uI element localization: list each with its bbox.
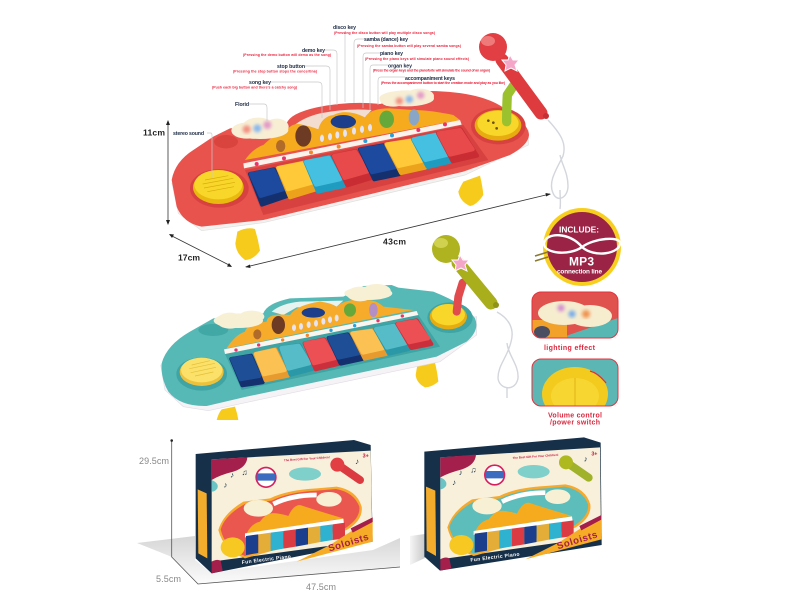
label: organ key: (Press the organ keys and the pianoforte will simulate the sound of an organ) xyxy=(373,68,490,72)
label: samba key: (Pressing the samba button will play several samba songs) xyxy=(357,44,461,48)
box face xyxy=(440,447,601,559)
corner blobs xyxy=(440,455,476,571)
label: disco key xyxy=(333,25,435,35)
speaker dial xyxy=(190,169,249,208)
music notes xyxy=(452,455,588,487)
piano body xyxy=(162,285,476,406)
age mark: 3+ xyxy=(591,451,597,457)
dimension: width 43cm: 43cm xyxy=(383,236,406,246)
piano artwork xyxy=(447,484,590,556)
box 2 floor shadow xyxy=(410,534,425,565)
label: Florid: Florid xyxy=(235,102,249,108)
product title: Fun Electric Piano xyxy=(242,554,291,566)
piano artwork xyxy=(218,487,362,558)
music notes: ♪ xyxy=(584,455,588,464)
corner ribbon xyxy=(525,515,601,559)
label: accompaniment keys: (Press the accompaniment button to start the creation mode and play as you like) xyxy=(381,81,505,85)
box shell xyxy=(424,437,602,571)
dimension: 5.5cm: 5.5cm xyxy=(156,574,181,584)
green microphone xyxy=(432,235,499,308)
include badge: connection line xyxy=(557,268,602,276)
caption: volume control xyxy=(548,412,602,426)
label: samba key: samba (dance) key xyxy=(364,37,408,43)
label: song key: (Push each big button and there's a catchy song) xyxy=(212,86,297,90)
teal piano box xyxy=(424,437,602,571)
handle arc xyxy=(273,495,317,504)
box dimension lines xyxy=(170,439,400,584)
corner blobs xyxy=(212,457,247,573)
teal bubble xyxy=(289,467,321,481)
cable loop xyxy=(544,235,620,254)
piano legs xyxy=(235,176,483,260)
cloud left xyxy=(214,311,264,329)
box face xyxy=(212,451,372,562)
banner xyxy=(247,505,343,533)
music notes: ♫ xyxy=(470,466,476,475)
music notes: ♪ xyxy=(230,470,234,479)
label: demo key: demo key xyxy=(302,48,325,54)
label: organ key xyxy=(373,64,490,72)
music notes xyxy=(223,457,359,489)
banner details xyxy=(234,303,404,352)
round logo xyxy=(484,464,505,486)
side label xyxy=(426,487,436,556)
clouds xyxy=(244,492,342,517)
panel: lighting effect xyxy=(532,292,618,338)
white strip xyxy=(243,120,462,168)
side label xyxy=(198,489,207,558)
tagline: The Best Gift For Your Children! xyxy=(284,455,330,462)
key tray xyxy=(225,315,440,390)
speaker dial xyxy=(176,357,227,391)
tagline: The Best Gift For Your Children! xyxy=(512,453,559,460)
label: organ key: organ key xyxy=(388,64,412,70)
red microphone cable xyxy=(548,120,568,209)
label: stop button: (Pressing the stop button stops the concertina) xyxy=(233,70,317,74)
piano keys xyxy=(231,320,431,385)
label: accompaniment keys xyxy=(381,76,505,85)
white underside rim xyxy=(161,317,477,411)
product title: Fun Electric Piano xyxy=(470,552,520,564)
handle opening xyxy=(293,109,372,129)
label: piano key xyxy=(365,51,469,61)
Soloists logo: Soloists xyxy=(556,529,599,552)
label: song key xyxy=(212,80,297,90)
yellow circle note xyxy=(221,537,245,557)
music notes: ♫ xyxy=(242,468,248,477)
raised bump xyxy=(214,135,238,148)
key tray xyxy=(245,125,488,215)
handle arc xyxy=(502,493,545,502)
age mark: 3+ xyxy=(363,454,369,460)
orange banner xyxy=(245,108,460,160)
caption: volume control: /power switch xyxy=(550,420,600,426)
label: song key: song key xyxy=(249,80,271,86)
red piano xyxy=(172,86,529,260)
maroon tag xyxy=(351,517,373,533)
volume knob xyxy=(471,108,526,144)
cloud right xyxy=(344,284,392,301)
microphone stand xyxy=(457,283,463,312)
label: disco key: disco key xyxy=(333,25,356,31)
raised bump xyxy=(198,324,228,336)
white strip xyxy=(224,311,418,354)
red microphone xyxy=(479,33,549,119)
piano body xyxy=(172,91,529,227)
dimension: 47.5cm: 47.5cm xyxy=(306,582,336,592)
label: piano key: piano key xyxy=(380,51,403,57)
caption: volume control: Volume control xyxy=(548,412,602,420)
clouds xyxy=(472,489,570,514)
Soloists logo: Soloists xyxy=(327,532,370,555)
microphone stand xyxy=(507,86,513,122)
light-up cloud right xyxy=(379,89,434,107)
music notes: ♪ xyxy=(452,478,456,487)
piano keys xyxy=(250,129,477,205)
maroon tag xyxy=(579,515,601,530)
dimension: width 43cm xyxy=(245,193,551,268)
keys xyxy=(475,520,574,553)
box shell xyxy=(196,440,373,573)
label: piano key: (Pressing the piano keys will simulate piano sound effects) xyxy=(365,57,469,61)
volume knob xyxy=(427,302,473,333)
label: demo key: (Pressing the demo button will demo as the song) xyxy=(243,53,331,57)
dimension: height 11cm xyxy=(143,120,170,225)
keys xyxy=(246,523,345,555)
audio plugs xyxy=(535,252,548,261)
music notes: ♪ xyxy=(459,468,463,477)
microphone art xyxy=(330,458,360,480)
green microphone cable xyxy=(497,312,518,398)
banner xyxy=(475,503,572,531)
piano legs xyxy=(217,360,438,420)
orange banner xyxy=(227,300,413,348)
label: samba key xyxy=(357,37,461,48)
include badge: INCLUDE: xyxy=(559,224,599,234)
teal piano xyxy=(161,283,477,420)
feature callout lines xyxy=(207,31,405,178)
label: stereo sound: stereo sound xyxy=(173,131,204,137)
include badge xyxy=(535,208,621,286)
label: accompaniment keys: accompaniment keys xyxy=(405,76,455,82)
microphone art xyxy=(559,455,589,478)
white underside rim xyxy=(172,130,528,231)
music notes: ♪ xyxy=(355,457,359,466)
panel: volume control xyxy=(532,358,618,406)
label: disco key: (Pressing the disco button will play multiple disco songs) xyxy=(334,31,435,35)
corner ribbon xyxy=(297,517,373,562)
include badge: MP3 xyxy=(569,254,594,268)
yellow circle note xyxy=(449,535,473,555)
box 1 floor shadow xyxy=(137,536,400,584)
label: stop button: stop button xyxy=(277,64,305,70)
dimension: depth 17cm xyxy=(169,234,232,267)
dimension: depth 17cm: 17cm xyxy=(178,252,200,262)
round logo xyxy=(255,467,277,488)
label: demo key xyxy=(243,48,331,57)
dimension: 29.5cm: 29.5cm xyxy=(139,456,169,466)
music notes: ♪ xyxy=(223,480,227,489)
teal bubble xyxy=(518,465,550,478)
light-up cloud left xyxy=(231,118,289,139)
banner details xyxy=(255,109,447,166)
red piano box xyxy=(196,440,373,573)
carrying handle xyxy=(287,103,378,127)
dimension: height 11cm: 11cm xyxy=(143,128,165,138)
caption: lighting effect: lighting effect xyxy=(544,345,596,352)
handle opening xyxy=(272,301,343,315)
label: stop button xyxy=(233,64,317,74)
